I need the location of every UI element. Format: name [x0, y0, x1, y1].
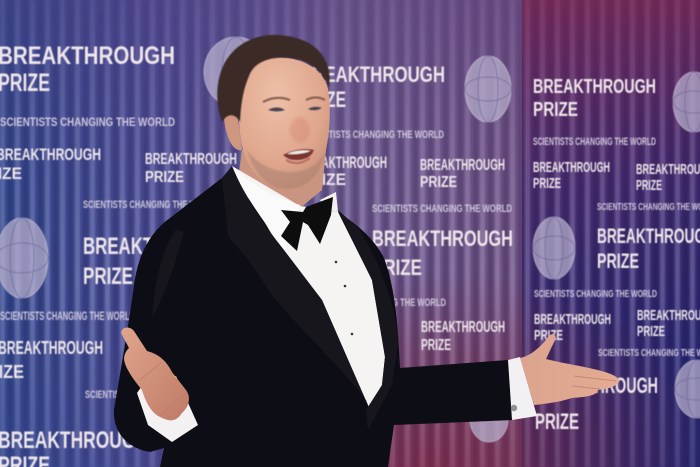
backdrop logo text: PRIZE	[535, 409, 579, 434]
backdrop logo text: PRIZE	[636, 177, 662, 194]
shirt studs	[335, 261, 353, 335]
backdrop logo text: PRIZE	[300, 170, 346, 189]
left satin lapel	[222, 166, 370, 410]
backdrop logo text: PRIZE	[145, 169, 184, 186]
stubble shadow	[247, 150, 325, 189]
backdrop logo text: BREAKTHROUGH	[0, 338, 103, 358]
bow tie	[281, 197, 333, 251]
backdrop logo text: BREAKTHROUGH	[0, 427, 148, 454]
right cuff	[508, 357, 537, 420]
brows and eyes	[263, 98, 325, 112]
backdrop logo text: BREAKTHROUGH	[533, 159, 610, 176]
backdrop logo text: PRIZE	[533, 175, 561, 192]
backdrop logo text: PRIZE	[372, 255, 422, 280]
cufflink	[511, 405, 517, 411]
backdrop logo text: SCIENTISTS CHANGING THE WORLD	[372, 203, 512, 215]
shirt front	[232, 166, 385, 410]
ear	[224, 114, 242, 150]
backdrop logo text: PRIZE	[534, 327, 563, 344]
backdrop logo text: PRIZE	[597, 250, 639, 273]
right lapel	[338, 210, 398, 430]
jacket	[114, 178, 513, 467]
person in tuxedo	[114, 35, 619, 467]
backdrop logo text: PRIZE	[533, 99, 578, 121]
backdrop logo text: BREAKTHROUGH	[300, 153, 387, 172]
backdrop logo text: SCIENTISTS CHANGING THE WORLD	[310, 297, 446, 309]
left cuff	[137, 376, 198, 442]
backdrop logo text: BREAKTHROUGH	[534, 311, 611, 328]
collar	[232, 166, 300, 250]
backdrop logo text: PRIZE	[0, 69, 50, 97]
backdrop logo text: BREAKTHROUGH	[145, 151, 237, 168]
backdrop logo text: BREAKTHROUGH	[372, 226, 513, 251]
backdrop logo text: BREAKTHROUGH	[420, 157, 505, 174]
nose colouring	[290, 117, 310, 143]
backdrop logo text: PRIZE	[300, 87, 346, 112]
finger lines	[140, 362, 616, 416]
face	[239, 57, 330, 189]
backdrop logo text: BREAKTHROUGH	[0, 42, 175, 70]
backdrop logo text: PRIZE	[421, 337, 451, 354]
backdrop logo text: SCIENTISTS CHANGING THE WORLD	[83, 199, 218, 211]
right hand	[520, 334, 619, 405]
backdrop logo text: BREAKTHROUGH	[421, 319, 505, 336]
backdrop logo text: PRIZE	[637, 323, 665, 340]
backdrop logo text: BREAKTHROUGH	[0, 145, 101, 164]
backdrop logo text: SCIENTISTS CHANGING THE WORLD	[0, 115, 175, 129]
backdrop logo text: SCIENTISTS CHANGING THE WORLD	[0, 309, 135, 323]
backdrop logo text: PRIZE	[83, 263, 133, 290]
sleeve sheen	[150, 228, 186, 325]
backdrop logo text: SCIENTISTS CHANGING THE WORLD	[305, 129, 444, 141]
backdrop logo text: PRIZE	[420, 174, 457, 191]
backdrop logo text: BREAKTHROUGH	[300, 62, 445, 87]
backdrop logo text: BREAKTHROUGH	[83, 233, 228, 260]
mouth	[283, 149, 314, 163]
neck	[238, 150, 326, 208]
backdrop logo text: SCIENTISTS CHANGING THE WORLD	[85, 389, 220, 401]
hair	[217, 35, 330, 122]
left hand	[121, 327, 189, 420]
